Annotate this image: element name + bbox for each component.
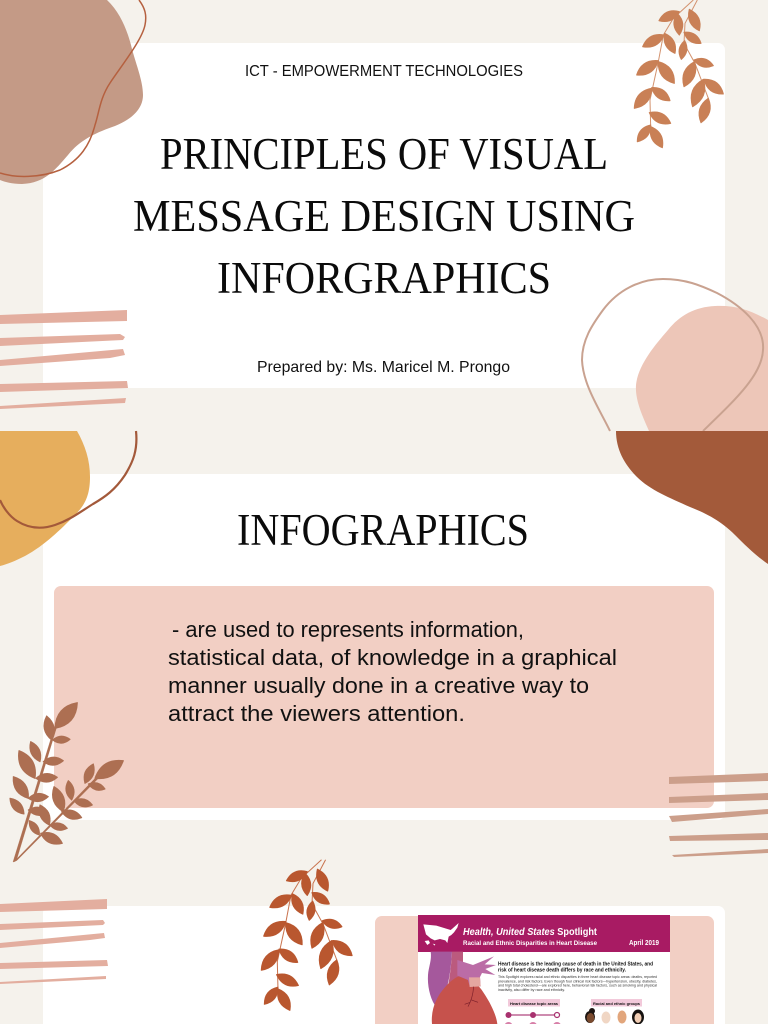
panel: sample infographic box: [375, 916, 714, 1024]
shape: brown blob: [616, 431, 768, 564]
embedded body text: [498, 975, 657, 992]
text: definition: attract the viewers attention.: [168, 701, 465, 726]
embedded date: April 2019: [629, 940, 659, 947]
text: course label: ICT - EMPOWERMENT TECHNOLOGIES: [245, 63, 523, 80]
panel: definition box: [54, 586, 714, 808]
embedded faces: [585, 1008, 644, 1024]
shape: right blush blob: [636, 306, 768, 431]
title: MESSAGE DESIGN USING: [133, 191, 635, 241]
title: PRINCIPLES OF VISUAL: [160, 129, 608, 179]
text: definition: [168, 617, 617, 726]
embedded lead text: [498, 962, 653, 974]
embedded label: groups: Racial and ethnic groups: [593, 1001, 641, 1006]
embedded lead text: risk of heart disease death differs by race and ethnicity.: [498, 968, 626, 974]
icon: lower-left leaf sprig: [7, 698, 127, 862]
title: INFORGRAPHICS: [217, 253, 551, 303]
embedded body text: and high total cholesterol—are explored here, behavioral risk factors, such as smoking and physical: [498, 984, 657, 988]
embedded body text: inactivity, also differ by race and ethnicity.: [498, 988, 565, 992]
embedded lead text: Heart disease is the leading cause of death in the United States, and: [498, 962, 653, 968]
shape: right outline loop: [582, 279, 763, 431]
embedded label: groups: [591, 999, 642, 1006]
panel: embedded infographic: [418, 915, 670, 1024]
text: definition: - are used to represents information,: [172, 617, 524, 642]
icon: left pink brush stripes lower: [0, 899, 108, 984]
illustration: heart: [428, 952, 497, 1024]
embedded body text: prevalence, and risk factors. Even though four clinical risk factors—hypertension, obesity, diabetes,: [498, 979, 657, 983]
title: [133, 129, 635, 303]
panel: infographics slide card: [43, 474, 725, 820]
embedded header band: [418, 915, 670, 952]
text: definition: statistical data, of knowledge in a graphical: [168, 645, 617, 670]
icon: US map: [423, 923, 459, 946]
text: definition: manner usually done in a creative way to: [168, 673, 589, 698]
embedded title: Health, United States Spotlight: [463, 927, 598, 938]
icon: left pink brush stripes: [0, 310, 128, 409]
shape: top-left taupe blob: [0, 0, 143, 184]
embedded subtitle: Racial and Ethnic Disparities in Heart Disease: [463, 940, 597, 947]
embedded label: topic areas: Heart disease topic areas: [510, 1001, 559, 1006]
shape: top-left outline curve: [0, 0, 146, 176]
panel: title slide card: [43, 43, 725, 388]
shape: brown outline curve: [0, 431, 136, 528]
embedded label: topic areas: [508, 999, 560, 1006]
panel: third slide card: [43, 906, 725, 1024]
heading: infographics: INFOGRAPHICS: [237, 505, 529, 555]
icon: right tan brush stripes: [669, 773, 768, 857]
embedded timeline dots: [504, 1012, 561, 1024]
shape: yellow blob: [0, 431, 90, 566]
embedded body text: This Spotlight explores racial and ethnic disparities in three heart disease topic areas: deaths, reported: [498, 975, 657, 979]
icon: top-right hanging leaves: [630, 0, 726, 150]
icon: center hanging leaves: [257, 860, 355, 1013]
text: author credit: Prepared by: Ms. Maricel M. Prongo: [257, 359, 510, 376]
